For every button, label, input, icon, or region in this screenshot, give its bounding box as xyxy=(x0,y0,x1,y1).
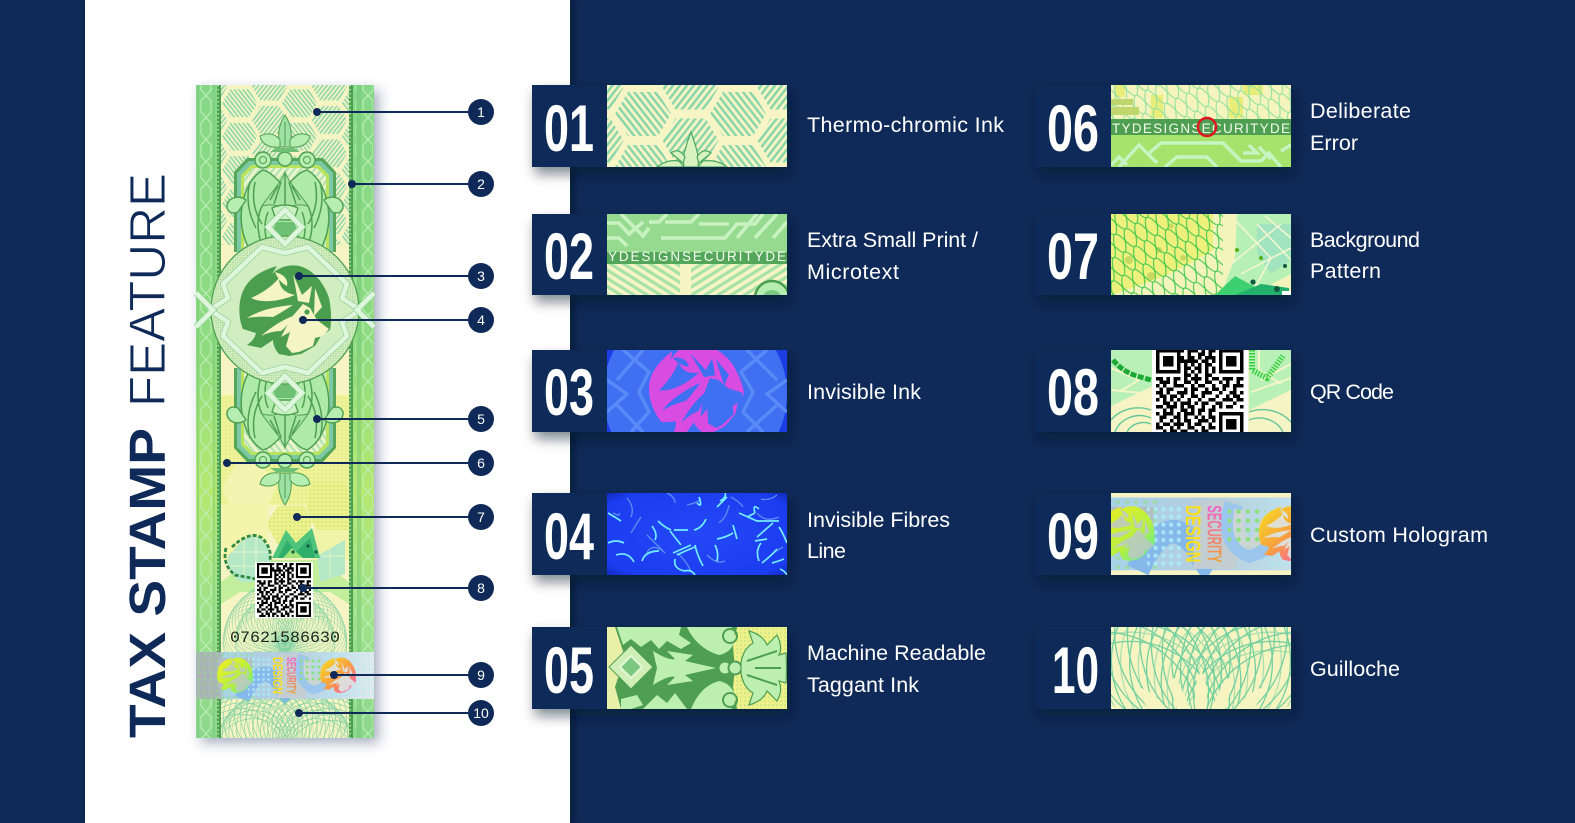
callouts 1 to 10: 8 xyxy=(477,580,485,596)
feature 03: invisible ink xyxy=(532,302,921,486)
feature 07: background pattern: Pattern xyxy=(1310,259,1381,283)
feature 07: background pattern xyxy=(1035,214,1420,295)
feature 01: thermo-chromic ink: Thermo-chromic Ink xyxy=(807,113,1004,137)
feature 07: background pattern: Background xyxy=(1310,228,1420,252)
feature 08: QR code: QR Code xyxy=(1310,380,1394,404)
feature 09: custom hologram: 09 xyxy=(1047,499,1099,573)
feature 06: deliberate error: 06 xyxy=(1047,91,1099,165)
stamp: crown and leaves xyxy=(221,528,349,604)
feature 04: invisible fibres: Line xyxy=(807,539,846,563)
stamp: ornament top xyxy=(227,115,343,252)
feature 06: deliberate error: TYDESIGNSECURITYDE xyxy=(1112,121,1290,136)
feature 01: thermo-chromic ink xyxy=(532,85,1004,167)
feature 02: microtext: Extra Small Print / xyxy=(807,228,978,252)
stamp: QR code xyxy=(255,562,313,618)
callouts 1 to 10 xyxy=(223,99,494,726)
feature 07: background pattern: 07 xyxy=(1047,219,1099,293)
feature 05: machine readable taggant ink: Machine Readable xyxy=(807,641,986,665)
callouts 1 to 10: 4 xyxy=(477,312,485,328)
stamp: ornament bottom xyxy=(227,368,343,505)
stamp: central medallion xyxy=(196,210,374,410)
white side panel xyxy=(85,0,570,823)
feature 02: microtext: YDESIGNSECURITYDE xyxy=(608,249,786,264)
feature 05: machine readable taggant ink: 05 xyxy=(544,633,594,707)
callouts 1 to 10: 6 xyxy=(477,455,485,471)
feature 02: microtext: Microtext xyxy=(807,260,899,284)
callouts 1 to 10: 7 xyxy=(477,509,485,525)
stamp: net background lower area xyxy=(221,395,349,652)
callouts 1 to 10: 1 xyxy=(477,104,485,120)
stamp: lion emblem xyxy=(239,265,331,356)
feature 04: invisible fibres: 04 xyxy=(544,499,594,573)
callouts 1 to 10: 5 xyxy=(477,411,485,427)
callouts 1 to 10: 2 xyxy=(477,176,485,192)
feature 09: custom hologram xyxy=(1035,493,1488,575)
title: tax stamp feature: TAX STAMP xyxy=(119,428,176,738)
feature 03: invisible ink: 03 xyxy=(544,355,594,429)
feature 05: machine readable taggant ink: Taggant Ink xyxy=(807,673,919,697)
feature 10: guilloche xyxy=(969,483,1449,823)
callouts 1 to 10: 9 xyxy=(477,667,485,683)
feature 02: microtext: 02 xyxy=(544,219,594,293)
feature 10: guilloche: Guilloche xyxy=(1310,657,1400,681)
callouts 1 to 10: 3 xyxy=(477,268,485,284)
title: tax stamp feature: FEATURE xyxy=(119,173,176,407)
stamp: hexagon thermo-chromic area xyxy=(221,85,349,245)
feature 06: deliberate error xyxy=(1035,85,1411,167)
feature 04: invisible fibres: Invisible Fibres xyxy=(807,508,950,532)
stamp: serial number: 07621586630 xyxy=(230,629,340,647)
feature 10: guilloche: 10 xyxy=(1052,633,1099,707)
feature 09: custom hologram: Custom Hologram xyxy=(1310,523,1488,547)
callouts 1 to 10: 10 xyxy=(473,705,489,721)
stamp illustration xyxy=(180,85,397,816)
feature 01: thermo-chromic ink: 01 xyxy=(544,91,594,165)
feature 05: machine readable taggant ink xyxy=(532,627,986,709)
feature 04: invisible fibres xyxy=(532,493,950,575)
stamp: rosette xyxy=(222,588,348,652)
title: tax stamp feature xyxy=(119,173,176,738)
stamp: hologram strip xyxy=(196,652,374,699)
feature 06: deliberate error: Deliberate xyxy=(1310,99,1411,123)
stamp: braided borders xyxy=(197,85,373,738)
feature 08: QR code xyxy=(1035,349,1394,436)
feature 08: QR code: 08 xyxy=(1047,355,1099,429)
stamp: guilloche area xyxy=(221,699,349,738)
feature 03: invisible ink: Invisible Ink xyxy=(807,380,921,404)
feature 02: microtext xyxy=(532,214,978,315)
feature 06: deliberate error: Error xyxy=(1310,131,1358,155)
